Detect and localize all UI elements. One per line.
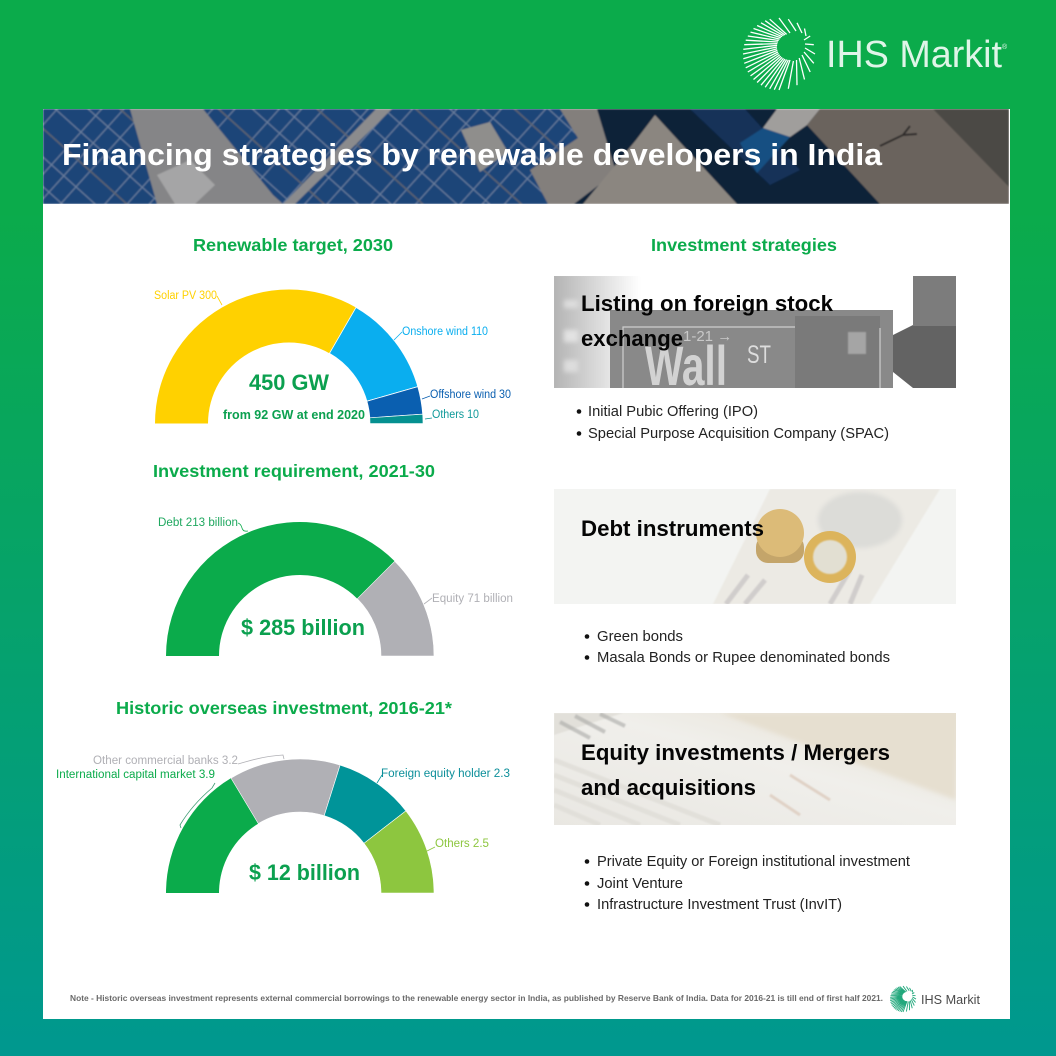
bullets: Joint Venture (597, 876, 683, 892)
sign text: Wall (645, 334, 727, 397)
bullets: Special Purpose Acquisition Company (SPAC) (588, 426, 889, 442)
header banner (43, 109, 1009, 204)
segment: offshore wind (367, 387, 423, 418)
heading line 2: and acquisitions (581, 775, 756, 800)
heading: investment strategies: Investment strategies (651, 235, 837, 255)
total: $ 12 billion (249, 860, 360, 885)
panel: listing on foreign stock exchange (550, 272, 956, 442)
footnote: Note - Historic overseas investment represents external commercial borrowings to the renewable energy sector in India, as published by Reserve Bank of India. Data for 2016-21 is till end of first half 2021. (70, 994, 883, 1003)
panel: equity investments (554, 713, 956, 913)
bullets: Private Equity or Foreign institutional investment (597, 854, 910, 870)
icon: sunburst logo (743, 18, 815, 90)
heading: historic overseas investment: Historic overseas investment, 2016-21* (116, 698, 452, 718)
label: foreign equity holder: Foreign equity holder 2.3 (381, 768, 510, 780)
logo wordmark: IHS Markit (826, 34, 1002, 76)
panel: debt instruments (554, 489, 956, 666)
segment: others (364, 811, 434, 893)
label: other commercial banks: Other commercial banks 3.2 (93, 755, 238, 767)
segment: onshore wind (330, 307, 418, 401)
title: Financing strategies by renewable developers in India (62, 137, 883, 172)
label: equity: Equity 71 billion (432, 593, 513, 605)
heading line 1: Listing on foreign stock (581, 291, 834, 316)
bullets (585, 854, 910, 913)
segment: equity (357, 561, 434, 656)
icon: small sunburst logo (890, 986, 916, 1012)
segment: others (370, 414, 423, 424)
sign street suffix: ST (747, 341, 771, 369)
label: others: Others 10 (432, 409, 479, 421)
footer wordmark: IHS Markit (921, 993, 981, 1007)
footer logo (890, 986, 981, 1012)
image: banknote and coins (554, 489, 956, 604)
chart: renewable target donut (154, 289, 511, 424)
bullets: Initial Pubic Offering (IPO) (588, 404, 758, 420)
total: $ 285 billion (241, 615, 365, 640)
bullets: Infrastructure Investment Trust (InvIT) (597, 897, 842, 913)
total: 450 GW (249, 370, 329, 395)
bullets: Masala Bonds or Rupee denominated bonds (597, 650, 890, 666)
segment: solar PV (155, 289, 356, 424)
bullets: Green bonds (597, 629, 683, 645)
label: others: Others 2.5 (435, 838, 489, 850)
label: onshore wind: Onshore wind 110 (402, 326, 488, 338)
label: offshore wind: Offshore wind 30 (430, 389, 511, 401)
segment: international capital market (166, 778, 258, 893)
chart: historic overseas investment donut (56, 755, 510, 893)
segment: debt (166, 522, 395, 656)
segment: other commercial banks (231, 759, 340, 824)
heading: investment requirement: Investment requirement, 2021-30 (153, 461, 435, 481)
label: solar PV: Solar PV 300 (154, 290, 217, 302)
label: international capital market: International capital market 3.9 (56, 769, 215, 781)
heading: Debt instruments (581, 516, 764, 541)
heading line 2: exchange (581, 326, 683, 351)
image: Wall St sign (554, 276, 956, 388)
segment: foreign equity holder (324, 765, 406, 843)
image: financial paper (554, 713, 956, 825)
sign number: 1-21 → (683, 328, 732, 345)
sub-total: from 92 GW at end 2020 (223, 408, 365, 422)
heading line 1: Equity investments / Mergers (581, 740, 890, 765)
chart: investment requirement donut (158, 517, 513, 656)
bullets (577, 404, 889, 442)
solar panel photo (43, 109, 1009, 204)
panel: white content card (43, 109, 1010, 1019)
bullets (585, 629, 890, 666)
label: debt: Debt 213 billion (158, 517, 238, 529)
registered mark: ® (1002, 43, 1008, 51)
logo: IHS Markit (743, 18, 1008, 90)
heading: renewable target: Renewable target, 2030 (193, 235, 393, 255)
